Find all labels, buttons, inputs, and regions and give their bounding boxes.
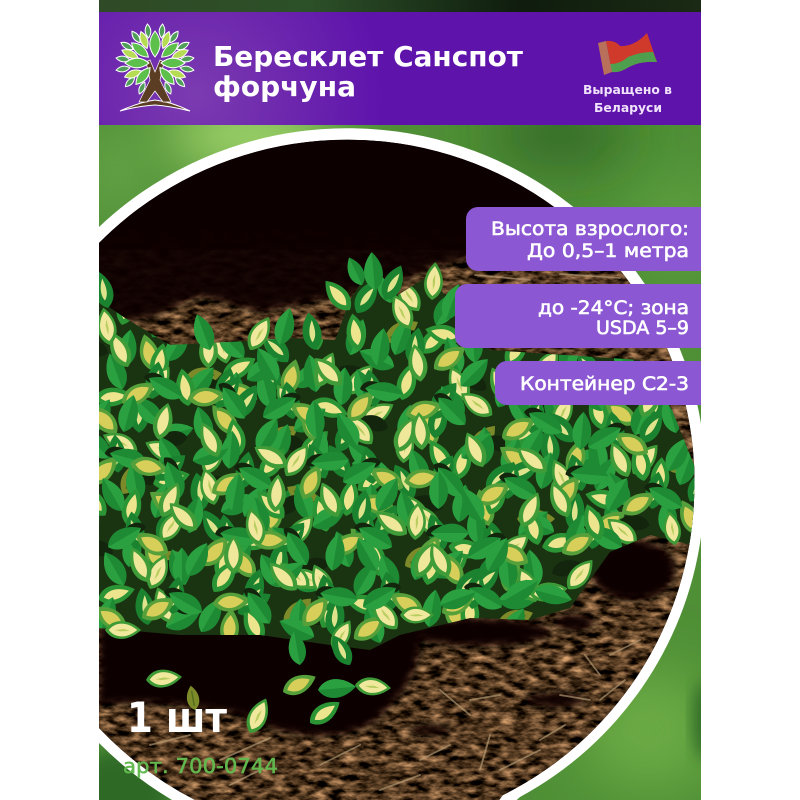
dark soil <box>85 125 705 800</box>
blurred green background <box>99 125 701 800</box>
centre leaf <box>150 31 160 57</box>
trunk <box>139 60 171 102</box>
title <box>213 41 523 103</box>
panel: container: Контейнер С2-3 <box>520 374 689 395</box>
bush body <box>99 277 694 650</box>
panel: height <box>466 207 701 271</box>
individual leaves <box>89 251 683 737</box>
circular plant photo <box>99 140 694 800</box>
panel: height: Высота взрослого: <box>491 219 689 240</box>
white circle frame <box>85 128 706 800</box>
soil speckle fade <box>99 215 624 275</box>
made in Belarus label <box>583 83 672 115</box>
title: форчуна <box>213 71 356 103</box>
left foliage <box>116 24 153 95</box>
panel: height: До 0,5–1 метра <box>527 241 689 262</box>
right foliage <box>157 24 194 95</box>
top dark strip <box>99 0 701 12</box>
quantity: 1 шт <box>127 693 228 742</box>
mulch ground <box>85 250 705 800</box>
mulch straw <box>150 274 640 790</box>
soil speckle <box>85 215 705 325</box>
purple header band <box>99 12 701 125</box>
panel: hardiness: USDA 5–9 <box>596 318 689 339</box>
made in Belarus label: Беларуси <box>594 101 662 115</box>
ground <box>120 100 190 111</box>
article number: арт. 700-0744 <box>123 754 278 778</box>
title: Бересклет Санспот <box>213 41 523 73</box>
logo: tree <box>116 24 194 111</box>
panel: hardiness <box>455 284 701 348</box>
product card <box>99 0 701 800</box>
icon: Belarus flag <box>598 33 657 75</box>
shadow patches <box>99 540 675 736</box>
made in Belarus label: Выращено в <box>583 83 672 97</box>
panel: hardiness: до -24°С; зона <box>538 298 689 319</box>
soil cover <box>99 140 554 325</box>
photo card <box>99 0 701 800</box>
panel: container <box>495 361 701 405</box>
